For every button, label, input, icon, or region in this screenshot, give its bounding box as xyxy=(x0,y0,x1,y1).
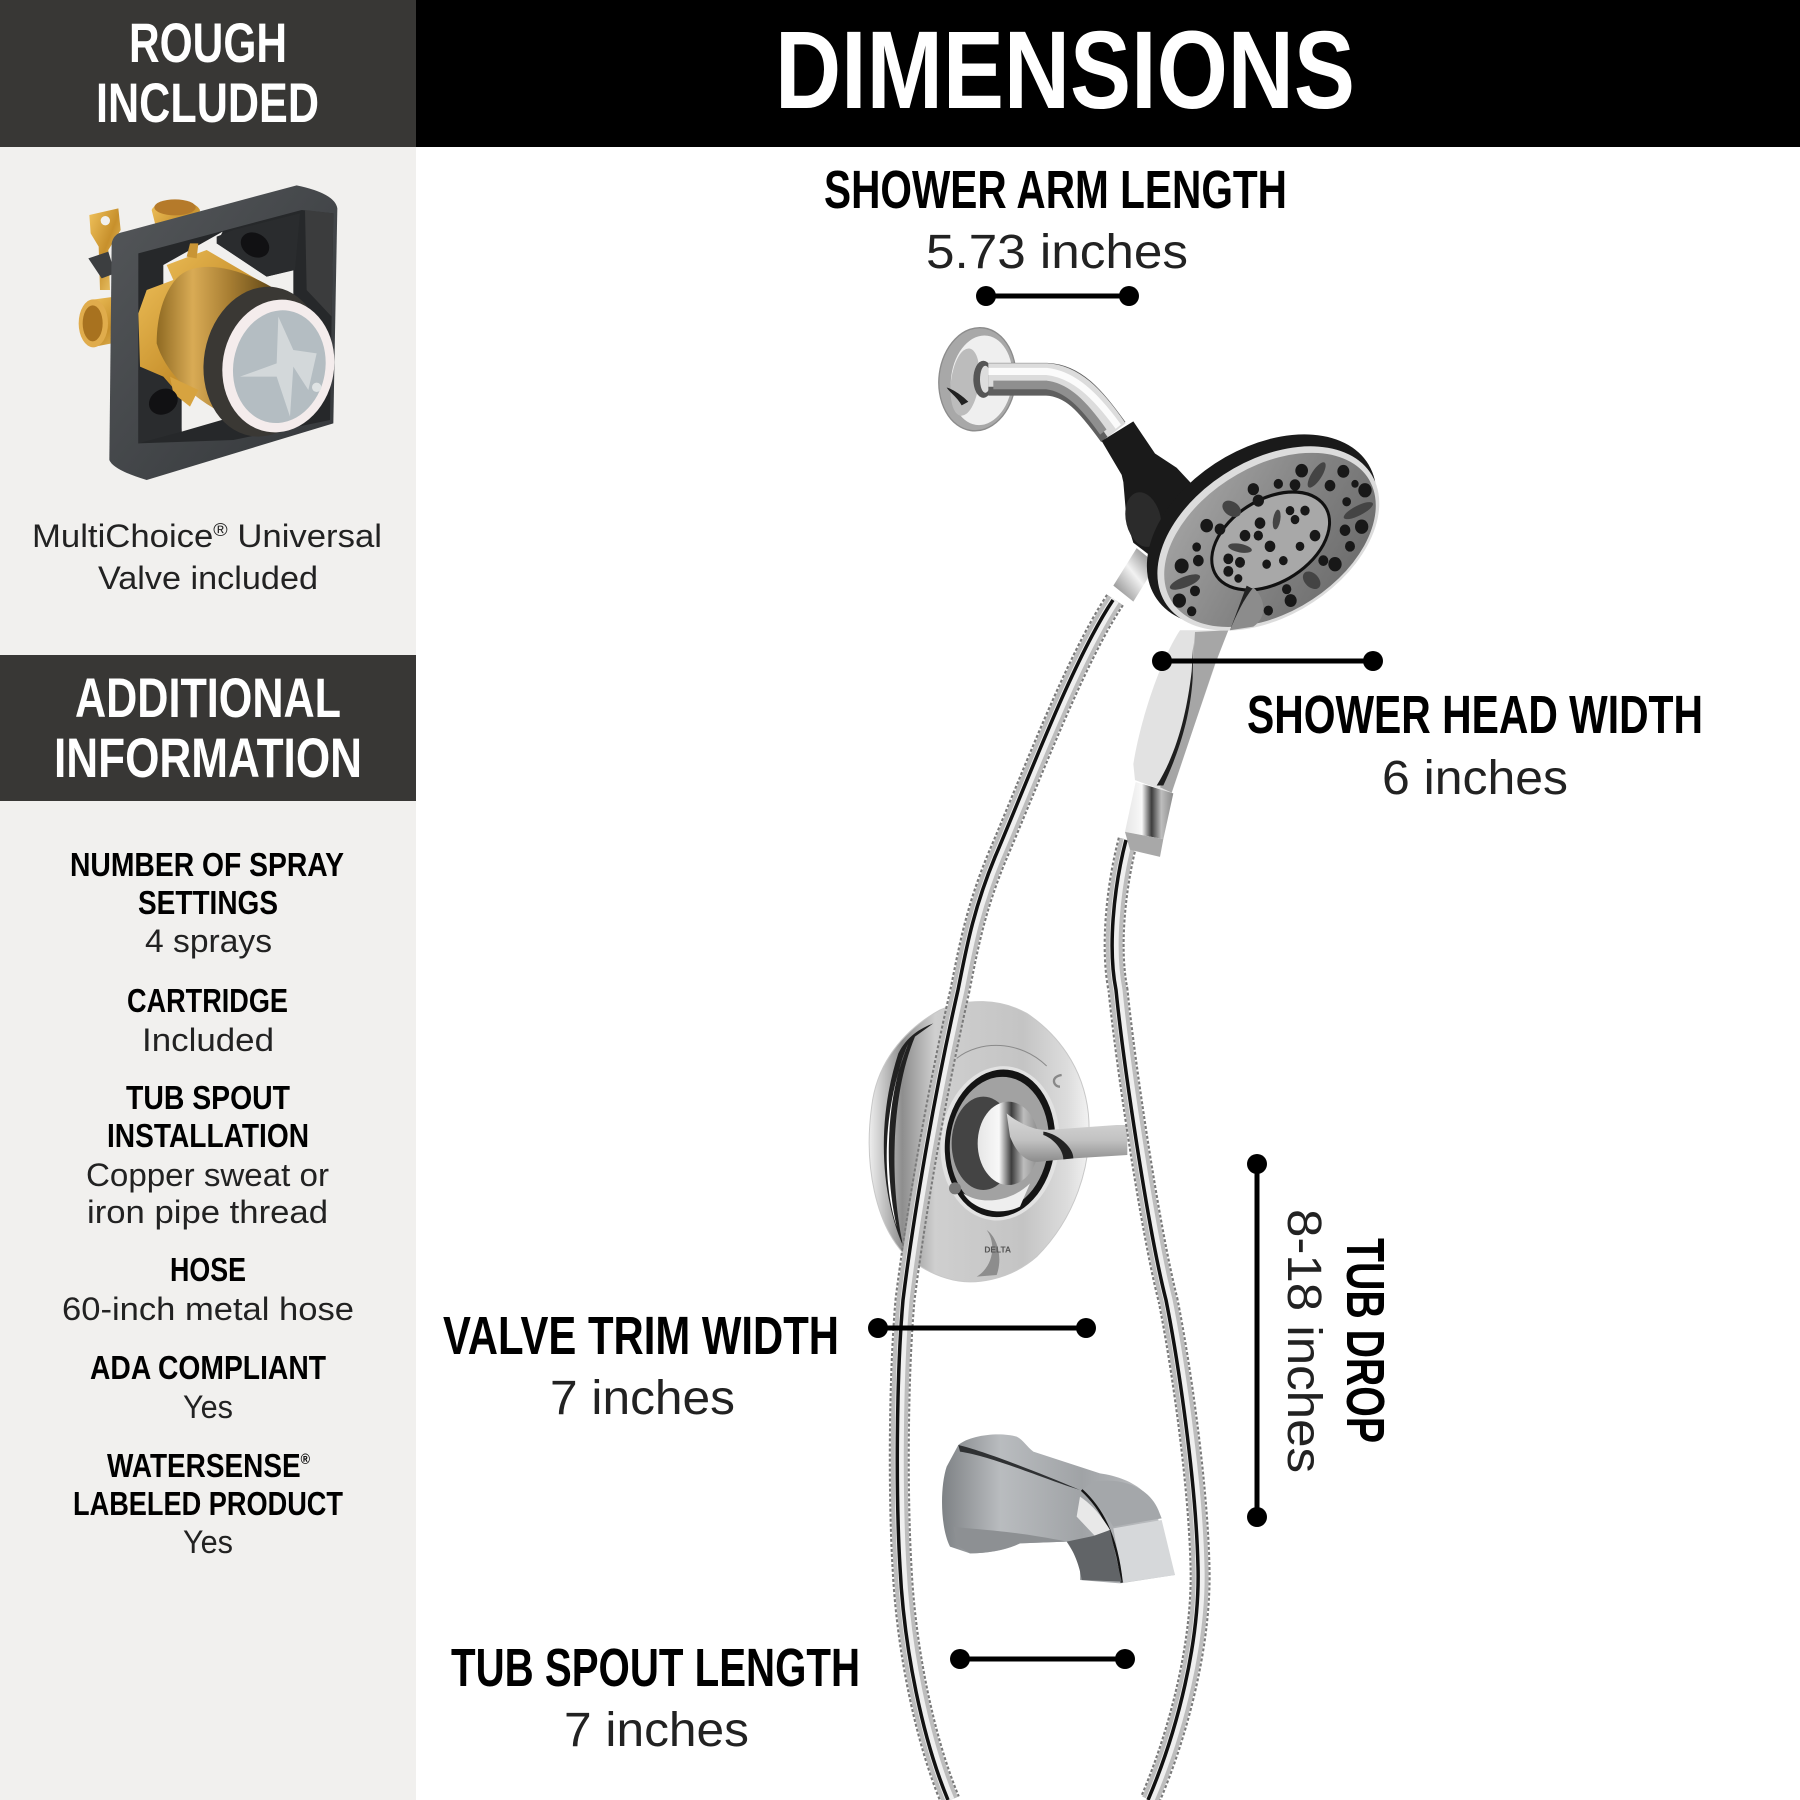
heading line: information: INFORMATION xyxy=(54,726,362,789)
product: valve trim plate xyxy=(869,1002,1127,1282)
spec: watersense labeled product: WATERSENSE xyxy=(107,1447,336,1484)
spec: watersense labeled product: Yes xyxy=(183,1524,233,1560)
dimension: shower arm length xyxy=(824,160,1287,306)
title: DIMENSIONS xyxy=(775,9,1355,132)
measure line xyxy=(976,286,1139,306)
panel: additional information heading xyxy=(0,655,416,801)
label: TUB SPOUT LENGTH xyxy=(451,1638,860,1698)
heading line: included: INCLUDED xyxy=(96,71,319,134)
heading line: additional: ADDITIONAL xyxy=(75,666,341,729)
spec: tub spout installation: TUB SPOUT xyxy=(126,1079,290,1116)
window cut-outs xyxy=(163,232,293,323)
dial recess xyxy=(933,1060,1067,1226)
value: 8-18 inches xyxy=(1277,1209,1330,1473)
caption line 1: MultiChoice xyxy=(32,518,199,554)
left strand xyxy=(897,600,1115,1800)
spec: tub spout installation: iron pipe thread xyxy=(87,1194,328,1230)
spec: watersense labeled product: ® xyxy=(301,1451,310,1468)
spec: cartridge: Included xyxy=(142,1022,274,1058)
spray holes xyxy=(1168,460,1375,616)
value: 6 inches xyxy=(1382,752,1568,805)
measure line xyxy=(950,1649,1135,1669)
caption line 1: ® xyxy=(213,520,228,540)
caption line 2: Valve included xyxy=(98,560,318,596)
spec: hose: HOSE xyxy=(170,1251,246,1288)
top copper pipe xyxy=(152,199,200,260)
spec: ada compliant: ADA COMPLIANT xyxy=(90,1349,326,1386)
shower head xyxy=(1116,395,1408,668)
brass body xyxy=(138,250,287,420)
left pipe xyxy=(79,293,147,347)
spec: hose: 60-inch metal hose xyxy=(62,1291,354,1327)
label: VALVE TRIM WIDTH xyxy=(443,1306,839,1366)
value: 5.73 inches xyxy=(926,226,1188,279)
dimension: valve trim width xyxy=(443,1306,1096,1425)
product: tub spout xyxy=(942,1434,1175,1583)
caption: valve included xyxy=(32,518,382,596)
panel: rough included heading xyxy=(0,0,416,147)
valve box frame xyxy=(109,185,337,480)
plate body xyxy=(869,1002,1089,1282)
arm tube xyxy=(988,371,1118,432)
heading line: rough: ROUGH xyxy=(129,11,287,74)
spec: watersense labeled product xyxy=(73,1447,343,1560)
spec: number of spray settings xyxy=(70,846,344,959)
spec: ada compliant xyxy=(90,1349,326,1425)
wall flange xyxy=(933,322,1022,436)
spec: tub spout installation: INSTALLATION xyxy=(107,1117,309,1154)
black collar and swivel xyxy=(1102,421,1203,561)
end cap xyxy=(192,277,345,446)
spec: cartridge: CARTRIDGE xyxy=(127,982,288,1019)
icon: rough-in valve xyxy=(79,185,345,480)
caption line 1: Universal xyxy=(228,518,382,554)
spec: number of spray settings: NUMBER OF SPRAY xyxy=(70,846,344,883)
dimension: tub spout length xyxy=(451,1638,1135,1757)
spec: watersense labeled product: LABELED PRODUCT xyxy=(73,1485,343,1522)
value: 7 inches xyxy=(550,1372,735,1425)
value: 7 inches xyxy=(564,1704,749,1757)
measure line xyxy=(1152,651,1383,671)
measure line xyxy=(1247,1154,1267,1527)
right strand xyxy=(1112,840,1200,1800)
mounting bracket xyxy=(89,208,121,290)
dimension: shower head width xyxy=(1152,651,1703,805)
title band xyxy=(416,0,1800,147)
spec: hose xyxy=(62,1251,354,1327)
lever handle xyxy=(978,1102,1127,1185)
product: flexible hose xyxy=(897,600,1200,1800)
spec: number of spray settings: 4 sprays xyxy=(145,923,272,959)
inner brackets xyxy=(217,213,300,277)
ferrule and handle body xyxy=(1113,548,1228,857)
spec: cartridge xyxy=(127,982,288,1058)
dimension: tub drop xyxy=(1247,1154,1395,1527)
rubber grommets xyxy=(144,227,274,420)
measure line xyxy=(868,1318,1096,1338)
brand mark: DELTA xyxy=(984,1245,1012,1255)
label: TUB DROP xyxy=(1335,1238,1395,1443)
spec: number of spray settings: SETTINGS xyxy=(138,884,278,921)
label: SHOWER ARM LENGTH xyxy=(824,160,1287,220)
product: shower arm and head xyxy=(933,322,1408,857)
spec: tub spout installation xyxy=(86,1079,329,1230)
spec: tub spout installation: Copper sweat or xyxy=(86,1157,329,1193)
spec: ada compliant: Yes xyxy=(183,1389,233,1425)
panel: sidebar background xyxy=(0,0,416,1800)
